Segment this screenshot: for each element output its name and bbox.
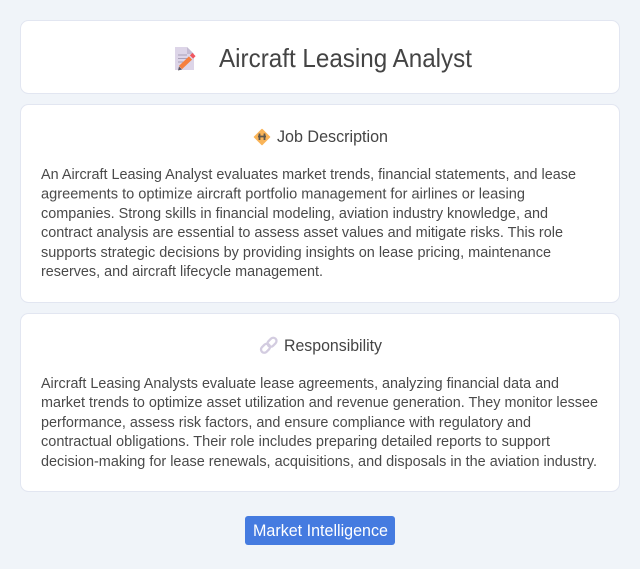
job description text: supports strategic decisions by providing insights on lease pricing, maintenance [41, 245, 551, 261]
button: market intelligence: Market Intelligence [253, 522, 388, 540]
responsibility text: Aircraft Leasing Analysts evaluate lease agreements, analyzing financial data and [41, 376, 559, 392]
panel: responsibility [20, 314, 620, 492]
job description text [41, 167, 576, 280]
responsibility text: performance, assess risk factors, and ensure compliance with regulatory and [41, 415, 531, 431]
job description text: reserves, and aircraft lifecycle management. [41, 264, 323, 280]
responsibility text: market trends to optimize asset utilization and revenue generation. They monitor lessee [41, 395, 598, 411]
responsibility text: contractual obligations. Their role includes preparing detailed reports to support [41, 434, 550, 450]
icon: diamond road sign [254, 130, 270, 144]
panel: job description [20, 104, 620, 302]
heading: responsibility: Responsibility [284, 337, 383, 355]
job description text: An Aircraft Leasing Analyst evaluates market trends, financial statements, and lease [41, 167, 576, 183]
title text: Aircraft Leasing Analyst [219, 43, 473, 73]
job description text: companies. Strong skills in financial modeling, aviation industry knowledge, and [41, 206, 548, 222]
job description text: agreements to optimize aircraft portfolio management for airlines or leasing [41, 186, 525, 202]
icon: chain link [260, 336, 278, 354]
icon: document with pencil [175, 47, 194, 70]
heading: job description: Job Description [277, 128, 388, 146]
responsibility text: decision-making for lease renewals, acquisitions, and disposals in the aviation industry. [41, 454, 597, 470]
panel: title [20, 20, 620, 94]
button: market intelligence [245, 516, 395, 545]
job description text: contract analysis are essential to assess asset values and mitigate risks. This role [41, 225, 563, 241]
responsibility text [41, 376, 598, 470]
